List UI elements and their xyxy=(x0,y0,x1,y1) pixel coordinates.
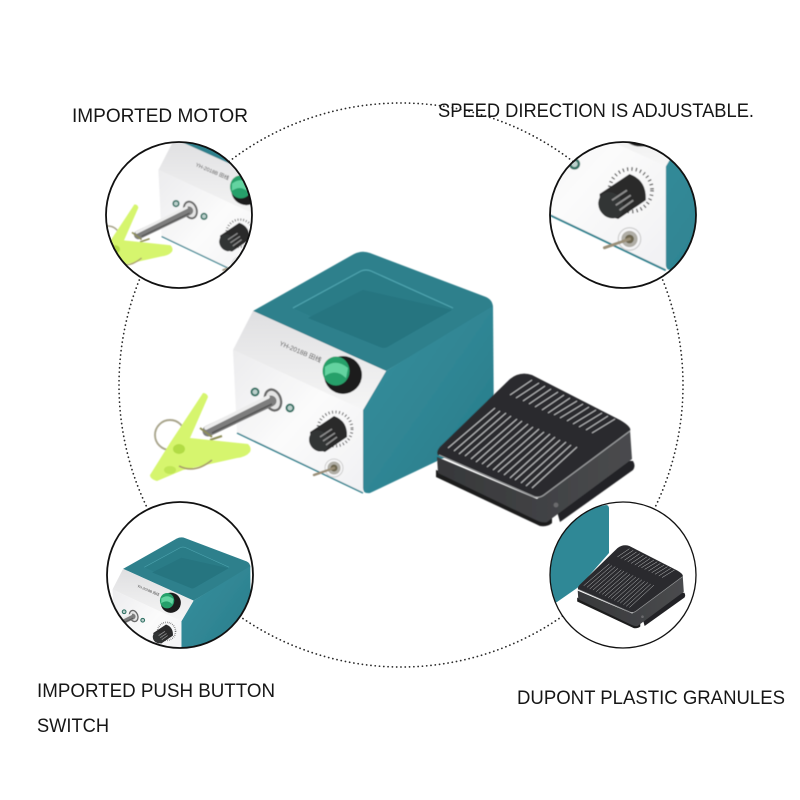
callout circle: imported motor detail xyxy=(105,141,253,289)
label: imported push button switch: SWITCH xyxy=(37,715,109,737)
dotted connecting ring xyxy=(119,103,683,667)
label: speed direction: SPEED DIRECTION IS ADJUSTABLE. xyxy=(438,100,754,122)
product: motor unit xyxy=(150,252,494,493)
label: imported push button switch: IMPORTED PUSH BUTTON xyxy=(37,680,275,702)
callout circle: push button switch detail xyxy=(106,501,254,649)
label: dupont plastic granules: DUPONT PLASTIC GRANULES xyxy=(517,687,785,709)
callout circle: speed direction detail xyxy=(549,141,697,289)
callout circle: plastic pedal detail xyxy=(530,502,696,648)
product: foot pedal xyxy=(436,374,634,526)
label: imported motor: IMPORTED MOTOR xyxy=(72,105,248,127)
